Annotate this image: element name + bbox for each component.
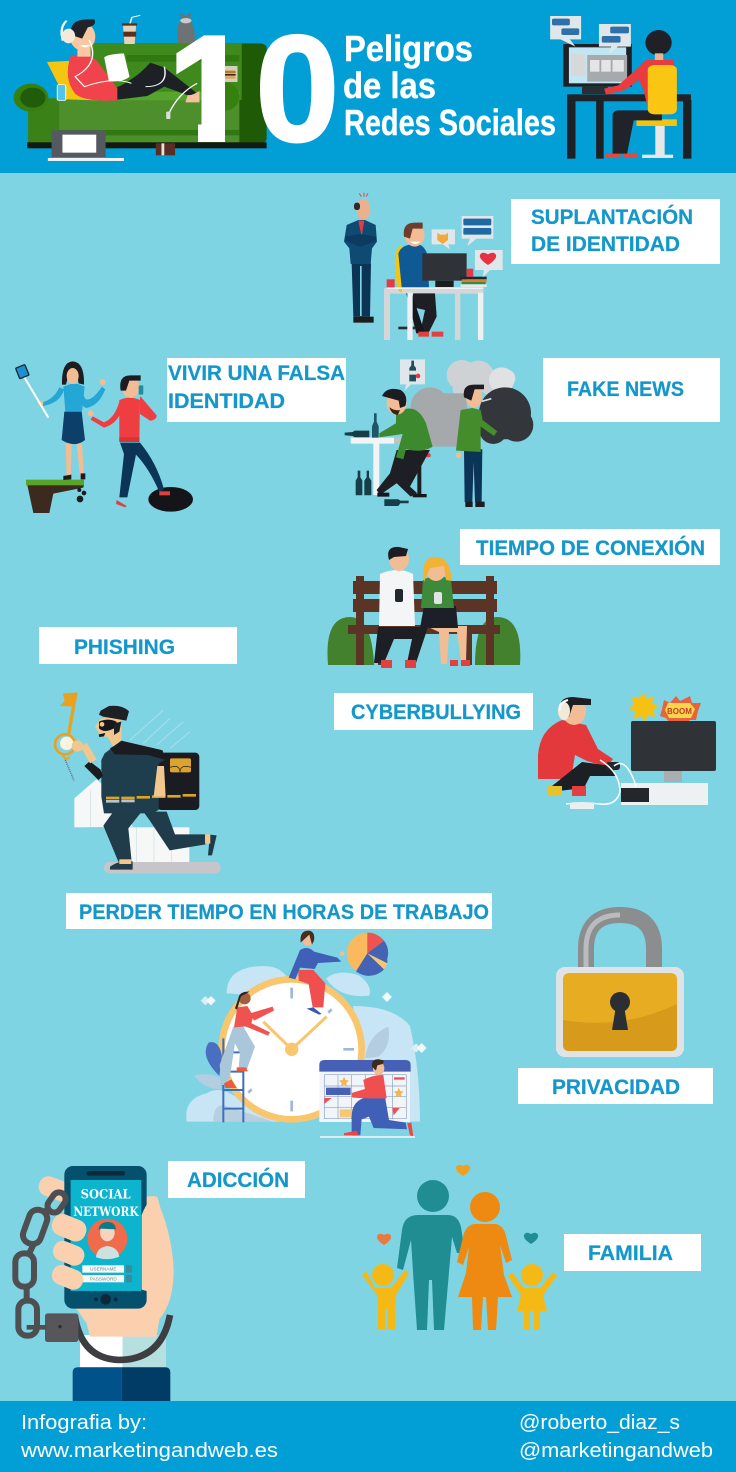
icon: hearts [377, 1165, 538, 1245]
label: privacidad [518, 1068, 713, 1104]
label: fake news [543, 358, 720, 422]
scene: thief with credit card and key [55, 693, 221, 873]
kneeling man [320, 1059, 415, 1138]
title: de las [343, 65, 436, 106]
heading number 10: 1 [168, 5, 253, 175]
woman on ladder [220, 992, 274, 1088]
plant leaves [194, 1027, 389, 1122]
footer credits left [20, 1411, 278, 1462]
title: Redes Sociales [344, 102, 556, 143]
girl [508, 1264, 557, 1329]
label: suplantacion [511, 199, 720, 264]
icon: phone on sofa [57, 85, 66, 101]
label: phishing [39, 627, 237, 664]
woman on top of clock [289, 931, 344, 1015]
icon: coffee cup [122, 15, 140, 44]
thumb [142, 1196, 174, 1293]
title: Peligros [344, 28, 473, 69]
clock face [218, 976, 365, 1123]
explosion badges: BOOM [667, 707, 692, 716]
explosion badges [628, 693, 701, 723]
label: familia [564, 1234, 701, 1271]
cliff [26, 480, 86, 513]
label: cyberbullying: CYBERBULLYING [351, 700, 521, 724]
desk [384, 288, 483, 340]
label: suplantacion: DE IDENTIDAD [531, 232, 680, 256]
label: adiccion [168, 1161, 305, 1198]
boy [362, 1264, 409, 1329]
label: phishing: PHISHING [74, 635, 175, 659]
phone: NETWORK [73, 1204, 139, 1219]
chain [15, 1190, 68, 1336]
phone [64, 1166, 147, 1309]
bag body [101, 741, 196, 813]
fingers [49, 1211, 89, 1293]
scene: family silhouette [362, 1165, 557, 1330]
scene: impersonation [344, 193, 503, 340]
speech bubble: cat [432, 229, 455, 249]
scene: gamer with headphones [538, 693, 716, 809]
credit card [157, 753, 199, 810]
father [397, 1180, 465, 1330]
label: perder tiempo: PERDER TIEMPO EN HORAS DE TRABAJO [79, 900, 489, 924]
floor shadow [104, 862, 221, 873]
man with phone [374, 547, 428, 668]
phone: PASSWORD [90, 1276, 117, 1281]
yellow cushion [47, 60, 106, 101]
seated man [395, 223, 443, 337]
gamer [538, 697, 636, 809]
scene: couple on bench with phones [327, 547, 520, 668]
label: vivir una falsa identidad [167, 358, 346, 422]
icon: cat [177, 13, 195, 43]
footer credits left: www.marketingandweb.es [20, 1439, 278, 1462]
key [55, 693, 83, 781]
laptop [48, 130, 124, 161]
scene: false identity [16, 361, 193, 513]
palm [75, 1196, 174, 1337]
desk front legs [387, 287, 483, 340]
books [156, 143, 175, 155]
woman with selfie stick [16, 361, 106, 480]
mother [457, 1192, 512, 1330]
heading number 10 [176, 34, 334, 144]
phone: USERNAME [90, 1267, 117, 1272]
footer credits right [519, 1411, 713, 1462]
label: cyberbullying [334, 693, 533, 730]
legs [103, 812, 206, 862]
label: vivir una falsa identidad: IDENTIDAD [168, 389, 285, 413]
angry man [344, 193, 377, 323]
bottle bubble [400, 359, 425, 391]
heading number 10: 0 [255, 4, 340, 174]
bushes [327, 617, 520, 665]
header band [0, 0, 736, 173]
back fingertip [36, 1174, 77, 1205]
calendar [319, 1060, 411, 1122]
label: privacidad: PRIVACIDAD [552, 1075, 680, 1099]
label: fake news: FAKE NEWS [567, 377, 684, 401]
icon: burger [222, 66, 238, 82]
label: vivir una falsa identidad: VIVIR UNA FALSA [168, 361, 345, 385]
hole [148, 487, 193, 512]
label: tiempo de conexion [460, 529, 720, 565]
stairs [74, 779, 189, 862]
woman with phone [420, 557, 470, 666]
vaping man [456, 385, 497, 507]
speech bubble: heart [475, 250, 503, 277]
icon: man at computer [550, 16, 691, 159]
icon: padlock [556, 915, 684, 1057]
handcuff [27, 1313, 170, 1360]
speech bubble: chat [462, 216, 493, 246]
shoes [110, 835, 217, 870]
icon: man on green sofa [14, 13, 267, 161]
shirt and sleeve [73, 1335, 170, 1402]
footer credits right: @roberto_diaz_s [519, 1411, 680, 1434]
table and bottles [345, 413, 411, 506]
person trousers [110, 63, 196, 101]
background blobs [186, 966, 420, 1122]
footer credits left: Infografia by: [21, 1411, 147, 1434]
label: tiempo de conexion: TIEMPO DE CONEXIÓN [476, 535, 705, 560]
title [343, 28, 556, 143]
scene: fake news [345, 359, 533, 507]
motion lines [130, 710, 190, 748]
person torso [68, 54, 117, 101]
tv [621, 721, 716, 805]
label: perder tiempo [66, 893, 492, 929]
bench [348, 576, 500, 665]
footer band [0, 1401, 736, 1472]
label: adiccion: ADICCIÓN [187, 1167, 289, 1192]
scene: people around a clock [186, 931, 427, 1138]
monitor and books [387, 253, 487, 287]
ladder [223, 1038, 243, 1122]
drunk man [377, 389, 433, 497]
pie chart [347, 933, 388, 976]
label: suplantacion: SUPLANTACIÓN [531, 204, 693, 229]
walking man on phone [88, 375, 170, 507]
scene: hand chained to phone [15, 1166, 174, 1402]
head with mask [95, 706, 129, 747]
arms [81, 743, 166, 797]
label: familia: FAMILIA [588, 1241, 673, 1265]
sparkles [201, 992, 427, 1053]
footer credits right: @marketingandweb [519, 1439, 713, 1462]
smoke clouds [411, 360, 533, 447]
phone: SOCIAL [81, 1187, 131, 1202]
